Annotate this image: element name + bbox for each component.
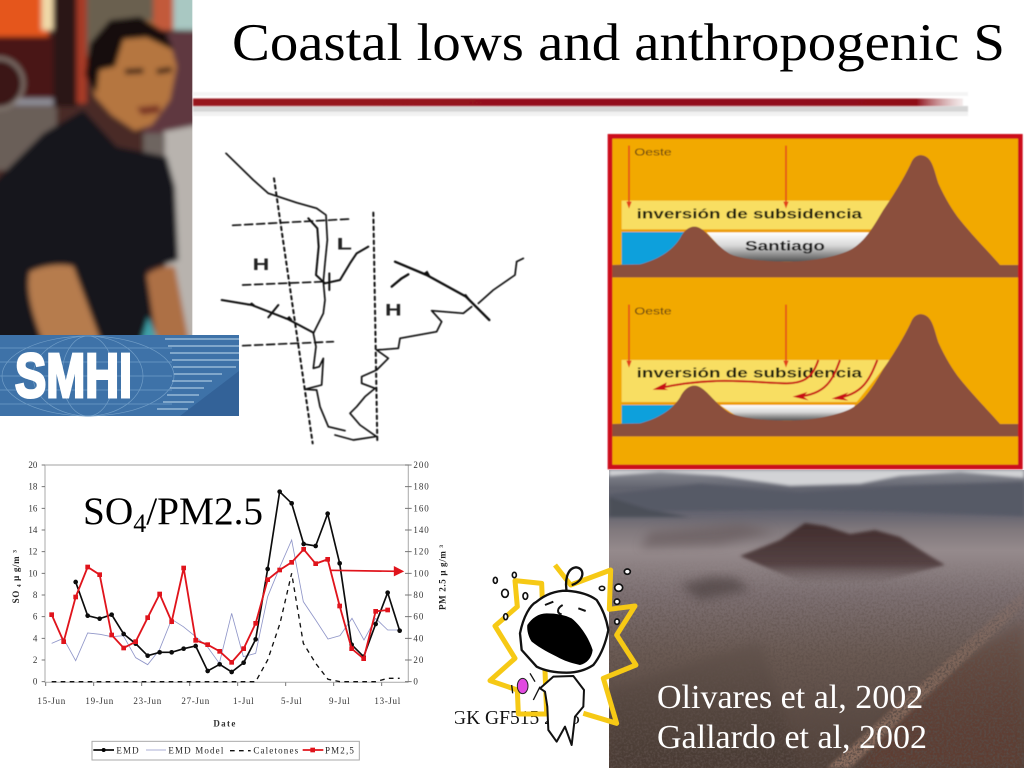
series: PM 2,5 (49, 547, 390, 665)
date labels: 13-Jul (374, 696, 401, 706)
upper inversion band (622, 201, 890, 229)
upper label west: Oeste (634, 148, 672, 159)
lower inversion band (622, 360, 890, 402)
left axis labels: 16 (28, 503, 38, 513)
map labels (253, 234, 402, 320)
chart overlay label: SO4/PM2.5: /PM2.5 (146, 489, 263, 533)
map low pressure trough (308, 218, 368, 283)
left axis labels: 6 (33, 612, 38, 622)
left axis title: SO ₄ μ g/m ³ (11, 549, 21, 603)
left axis labels: 12 (28, 547, 37, 557)
upper smog pool (707, 232, 871, 262)
x axis title: Date (213, 719, 237, 729)
date labels: 23-Jun (133, 696, 162, 706)
right axis labels: 140 (413, 525, 430, 535)
upper subsidence arrows (629, 146, 786, 205)
date labels: 15-Jun (37, 696, 66, 706)
lower ocean (622, 405, 680, 424)
upper label inversion: inversión de subsidencia (637, 205, 862, 221)
left axis labels: 20 (28, 460, 38, 470)
chart legend (92, 741, 359, 760)
left axis labels: 8 (33, 590, 38, 600)
chart legend: EMD Model (168, 746, 225, 756)
date labels: 9-Jul (329, 696, 350, 706)
panel: subsidence inversion diagram (610, 136, 1020, 467)
map cold front west (222, 273, 329, 333)
starburst (490, 565, 636, 723)
date labels: 5-Jul (281, 696, 302, 706)
upper scene (612, 146, 1018, 277)
upper terrain (612, 155, 1018, 277)
right axis labels: 120 (413, 547, 430, 557)
logo dark corner (180, 371, 239, 416)
far mountains (609, 482, 1024, 517)
map meridians (274, 178, 377, 443)
right axis labels: 20 (413, 655, 424, 665)
date labels: 27-Jun (181, 696, 210, 706)
map front triangles (247, 271, 470, 320)
right axis labels: 200 (413, 460, 430, 470)
left axis labels: 2 (33, 655, 37, 665)
arm (512, 673, 540, 700)
photo: smog over Santiago (609, 470, 1024, 768)
upper ocean (622, 232, 687, 265)
photo: portrait of man in dark shirt (0, 0, 207, 347)
date labels: 19-Jun (85, 696, 114, 706)
logo: SMHI (0, 335, 239, 416)
right axis labels: 40 (413, 633, 424, 643)
logo globe grid (0, 336, 174, 416)
small hill (680, 577, 750, 600)
series: Caletones (52, 573, 400, 682)
logo stripes (157, 339, 239, 409)
mouth (527, 613, 593, 665)
residual footer text: GK GF515 2-15 (452, 708, 580, 729)
lower flow arrows (657, 360, 877, 398)
lower smog pool (720, 405, 855, 421)
diagram frame (610, 136, 1020, 467)
map west coast (226, 153, 375, 440)
left axis labels: 14 (28, 525, 38, 535)
logo name: SMHI (15, 342, 132, 411)
title: Coastal lows and anthropogenic S (232, 14, 1005, 72)
left axis labels: 10 (28, 568, 38, 578)
far hazy ridge (640, 524, 775, 548)
map labels: H (385, 301, 402, 320)
upper label city: Santiago (745, 238, 825, 254)
lower subsidence arrows (629, 305, 786, 364)
right axis labels: 0 (413, 677, 419, 687)
curl (566, 567, 582, 595)
right axis labels: 60 (413, 612, 424, 622)
chart legend: EMD (116, 746, 140, 756)
lower scene (612, 305, 1018, 436)
series: EMD Model (52, 540, 400, 665)
egg (517, 678, 528, 694)
tear drops (493, 569, 630, 624)
chart: SO4 and PM2.5 time series (11, 460, 448, 760)
map cold front east (392, 262, 489, 320)
Cerro hill (740, 523, 945, 582)
chart legend: Caletones (253, 746, 299, 756)
right axis title: PM 2.5 μ g/m ³ (438, 544, 448, 610)
red arrow to right axis (330, 567, 402, 575)
series: EMD (73, 489, 402, 674)
chart ticks (42, 465, 412, 686)
map labels: L (337, 234, 352, 253)
lower terrain (612, 314, 1018, 436)
citation: Olivares: Olivares et al, 2002 (657, 679, 923, 716)
right axis labels: 180 (413, 482, 430, 492)
brows and nose (545, 602, 586, 614)
chart legend: PM2,5 (325, 746, 355, 756)
date labels: 1-Jul (233, 696, 254, 706)
body (540, 676, 584, 745)
map east coast (350, 258, 523, 437)
right axis labels: 100 (413, 568, 430, 578)
chart overlay label: SO4/PM2.5: 4 (133, 509, 146, 538)
left axis labels: 18 (28, 482, 38, 492)
chart overlay label: SO4/PM2.5: SO (83, 489, 133, 533)
left axis labels: 0 (33, 677, 38, 687)
right axis labels: 80 (413, 590, 424, 600)
date labels (37, 696, 401, 706)
citation: Gallardo: Gallardo et al, 2002 (657, 719, 927, 756)
title rule (193, 92, 968, 116)
icon: crying baby cartoon (490, 565, 636, 745)
lower label west: Oeste (634, 306, 672, 317)
map: coastal low weather chart of South America (222, 153, 523, 443)
chart frame (45, 465, 408, 682)
snowy peaks (609, 470, 1024, 486)
map graticule (233, 219, 350, 346)
road and city blocks (609, 584, 1024, 768)
lower label inversion: inversión de subsidencia (637, 364, 862, 380)
head (520, 591, 608, 673)
left axis labels (28, 460, 38, 687)
right axis labels (413, 460, 430, 687)
left axis labels: 4 (33, 633, 38, 643)
map labels: H (253, 255, 269, 274)
right axis labels: 160 (413, 503, 430, 513)
